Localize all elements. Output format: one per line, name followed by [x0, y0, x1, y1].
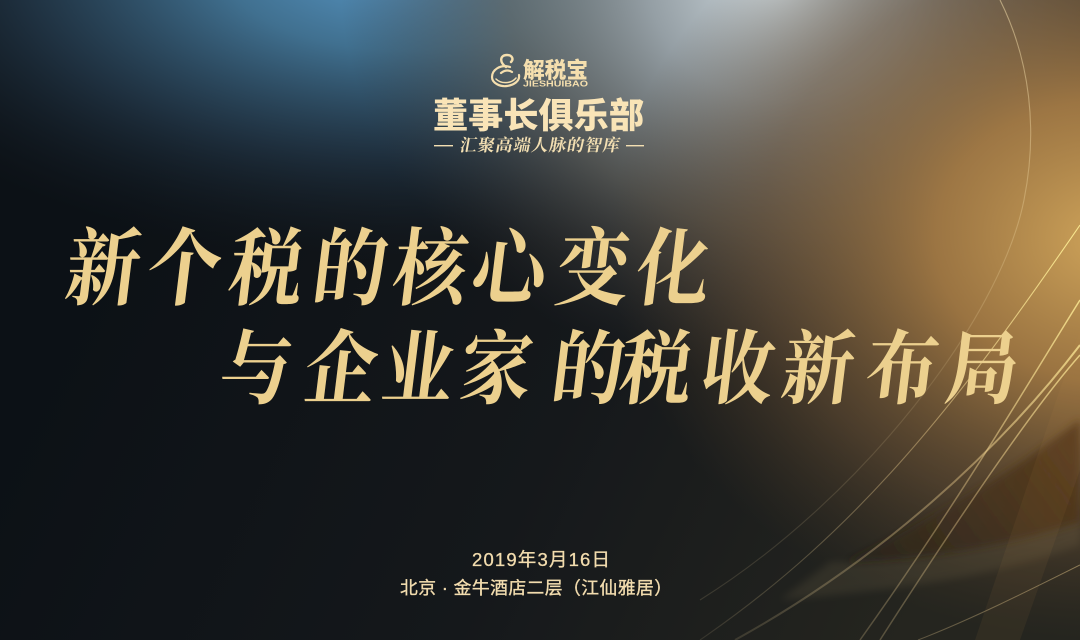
tagline: 汇聚高端人脉的智库	[458, 135, 622, 155]
logo	[492, 55, 589, 88]
club heading: 董事长俱乐部	[433, 97, 644, 136]
main title line 1: 新个税的核心变化	[61, 224, 716, 317]
decorative light curves	[700, 0, 1080, 640]
venue: 北京 · 金牛酒店二层（江仙雅居）	[400, 578, 672, 598]
logo latin name: JIESHUIBAO	[523, 78, 589, 88]
icon: logo mark	[492, 55, 519, 86]
date: 2019年3月16日	[472, 549, 610, 570]
main title line 2: 与企业家的税收新布局	[215, 326, 1024, 415]
logo name: 解税宝	[523, 58, 588, 83]
